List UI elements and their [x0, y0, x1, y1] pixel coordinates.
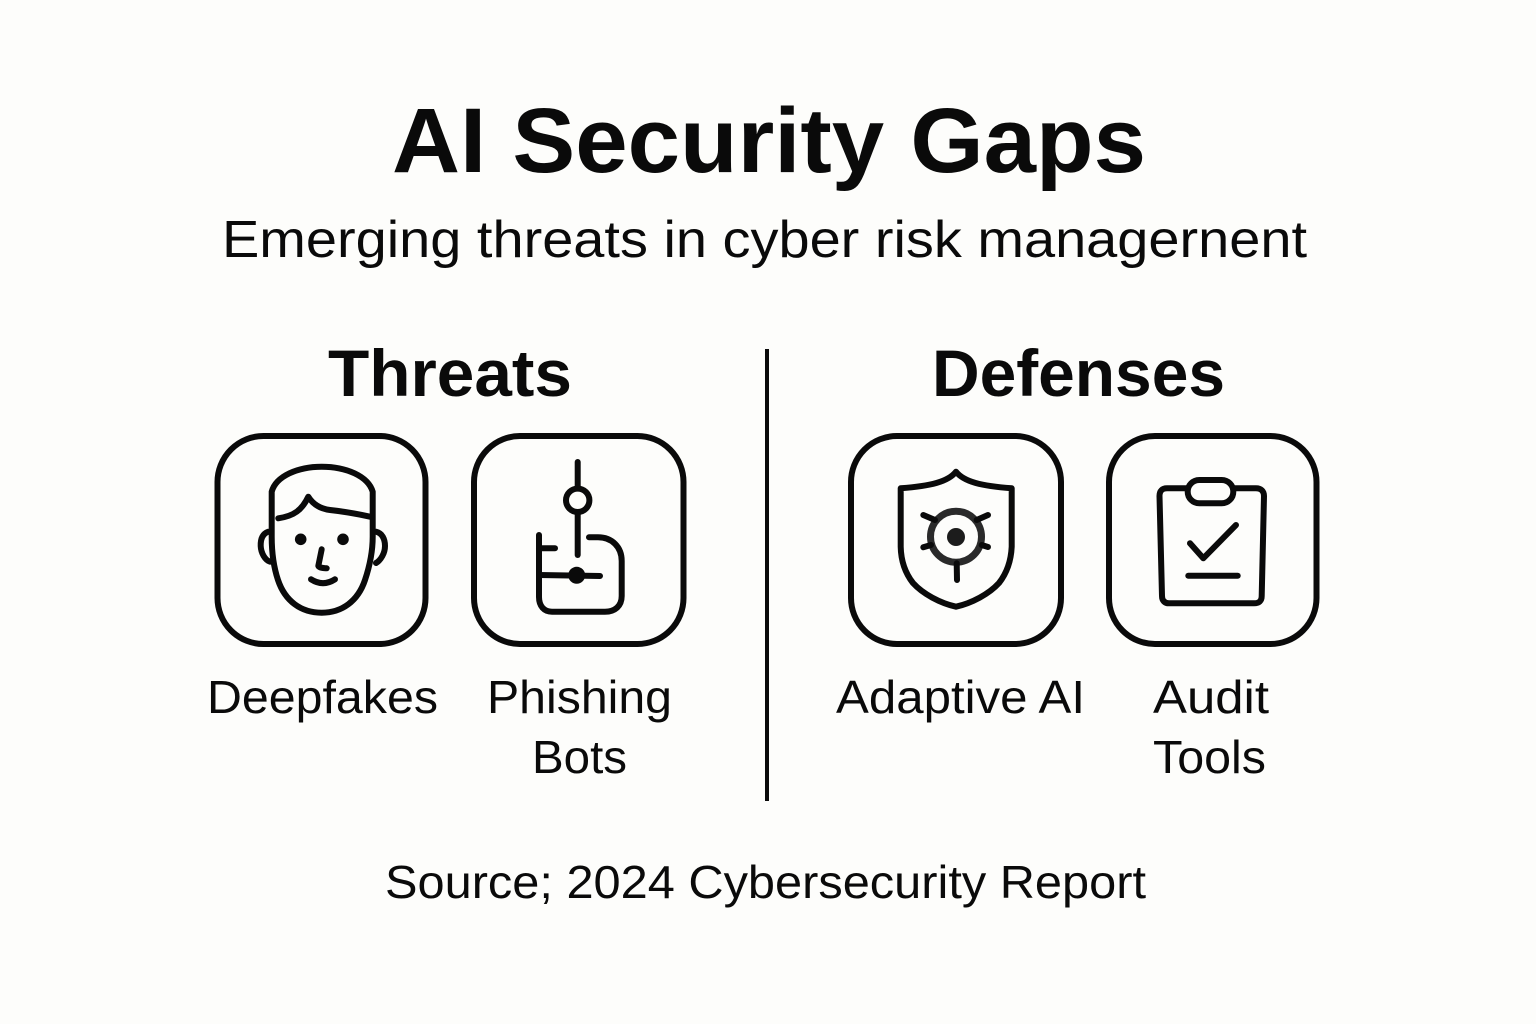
title: AI Security Gaps [392, 90, 1146, 192]
subtitle: Emerging threats in cyber risk managernent [222, 211, 1308, 269]
heading: defenses: Defenses [932, 336, 1225, 410]
heading: threats: Threats [328, 336, 572, 410]
label: deepfakes: Deepfakes [207, 671, 438, 723]
label: audit tools: Tools [1153, 731, 1266, 783]
panel: defenses [836, 336, 1316, 783]
label: audit tools: Audit [1153, 671, 1269, 723]
label: audit tools [1153, 671, 1269, 783]
label: phishing bots [487, 671, 672, 783]
label: phishing bots: Bots [532, 731, 627, 783]
icon: deepfakes face [218, 436, 426, 644]
icon: phishing hook [474, 436, 684, 644]
panel: threats [207, 336, 684, 783]
label: phishing bots: Phishing [487, 671, 672, 723]
icon: adaptive AI shield [851, 436, 1061, 644]
center divider [765, 349, 769, 801]
icon: audit clipboard [1109, 436, 1316, 644]
source note: Source; 2024 Cybersecurity Report [385, 856, 1146, 908]
label: adaptive AI: Adaptive AI [836, 671, 1085, 723]
